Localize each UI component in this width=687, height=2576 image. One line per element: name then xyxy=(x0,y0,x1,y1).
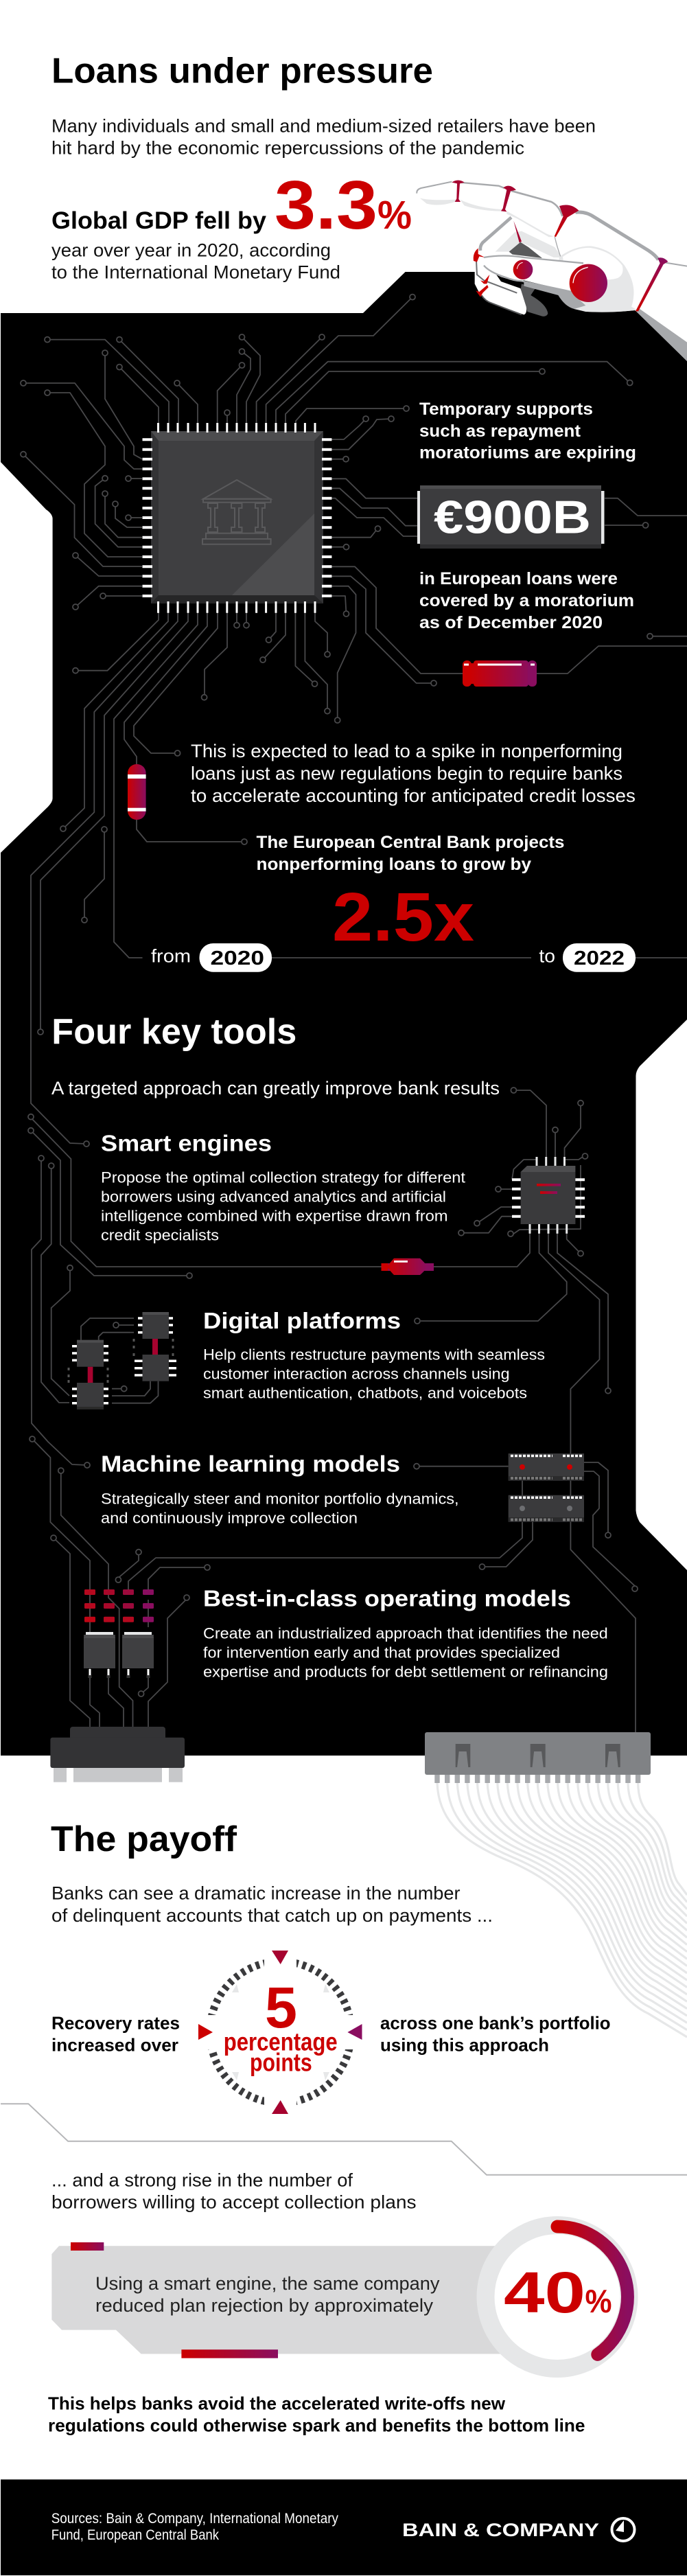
moratorium text: in European loans were xyxy=(419,569,618,588)
tool: smart engines: Propose the optimal collection strategy for different xyxy=(101,1169,465,1186)
footer xyxy=(1,2479,687,2575)
collection plans text xyxy=(51,2170,417,2212)
GDP statistic: to the International Monetary Fund xyxy=(51,262,340,283)
tool: best-in-class operating models: for intervention early and that provides specialized xyxy=(203,1644,560,1661)
conclusion text: This helps banks avoid the accelerated write-offs new xyxy=(48,2393,506,2414)
temporary supports text: moratoriums are expiring xyxy=(419,444,636,463)
icon: red resistor xyxy=(463,660,537,687)
payoff intro text xyxy=(51,1883,493,1926)
icon: bank building xyxy=(202,480,271,544)
moratorium text: covered by a moratorium xyxy=(419,591,634,610)
tool: digital platforms: customer interaction across channels using xyxy=(203,1366,510,1383)
tool: digital platforms: Digital platforms xyxy=(203,1308,401,1333)
black circuit board background xyxy=(1,272,687,1756)
icon: memory chips xyxy=(509,1453,584,1522)
tool: best-in-class operating models: Create an industrialized approach that identifies the need xyxy=(203,1625,608,1642)
temporary supports text xyxy=(419,400,636,463)
collection plans text: borrowers willing to accept collection plans xyxy=(51,2192,417,2212)
intro text xyxy=(51,116,596,159)
tool: machine learning models: and continuously improve collection xyxy=(101,1510,358,1527)
tool: machine learning models: Machine learning models xyxy=(101,1451,400,1476)
tool: smart engines xyxy=(101,1131,465,1244)
targeted approach text: A targeted approach can greatly improve bank results xyxy=(51,1078,500,1099)
tool: smart engines: borrowers using advanced analytics and artificial xyxy=(101,1188,446,1206)
recovery rates text left xyxy=(51,2013,180,2055)
tool: digital platforms xyxy=(203,1308,545,1402)
GDP statistic: % xyxy=(377,193,412,238)
intro text: hit hard by the economic repercussions of the pandemic xyxy=(51,138,524,159)
40% ring gauge: 40 xyxy=(504,2260,585,2325)
timeline from 2020 to 2022 xyxy=(151,943,636,972)
spike text xyxy=(191,741,636,806)
circuit traces: main chip xyxy=(21,295,687,1147)
conclusion text xyxy=(48,2393,585,2436)
recovery rates text left: Recovery rates xyxy=(51,2013,180,2034)
spike text: loans just as new regulations begin to require banks xyxy=(191,763,622,784)
tool: smart engines: credit specialists xyxy=(101,1227,219,1244)
5 percentage points gauge xyxy=(198,1951,362,2114)
icon: right ribbon connector xyxy=(425,1732,651,1783)
GDP statistic xyxy=(51,167,412,283)
portfolio text right: across one bank’s portfolio xyxy=(380,2013,611,2034)
timeline from 2020 to 2022: to xyxy=(539,946,555,967)
heading: four key tools: Four key tools xyxy=(51,1012,296,1052)
sources: Sources: Bain & Company, International Monetary xyxy=(51,2511,338,2527)
tool: smart engines: intelligence combined with expertise drawn from xyxy=(101,1208,448,1225)
€900B chip callout: €900B xyxy=(434,492,591,544)
sources xyxy=(51,2511,338,2543)
GDP statistic: 3.3 xyxy=(275,167,377,244)
tool: machine learning models: Strategically steer and monitor portfolio dynamics, xyxy=(101,1491,459,1508)
payoff intro text: Banks can see a dramatic increase in the number xyxy=(51,1883,460,1904)
ribbon wires xyxy=(437,1783,687,2037)
GDP statistic: Global GDP fell by xyxy=(51,207,267,234)
icon: robot hand xyxy=(417,180,687,361)
GDP statistic: year over year in 2020, according xyxy=(51,240,331,261)
spike text: This is expected to lead to a spike in nonperforming xyxy=(191,741,622,761)
plan rejection panel: reduced plan rejection by approximately xyxy=(95,2295,434,2316)
portfolio text right: using this approach xyxy=(380,2034,549,2055)
temporary supports text: Temporary supports xyxy=(419,400,593,419)
tool: machine learning models xyxy=(101,1451,459,1527)
icon: vertical capacitor xyxy=(128,764,146,820)
40% ring gauge xyxy=(476,2216,638,2378)
temporary supports text: such as repayment xyxy=(419,422,581,441)
40% ring gauge: % xyxy=(585,2283,612,2319)
plan rejection panel: Using a smart engine, the same company xyxy=(95,2273,440,2294)
tool: best-in-class operating models: expertise and products for debt settlement or refinancing xyxy=(203,1664,608,1681)
timeline from 2020 to 2022: 2020 xyxy=(210,947,264,969)
title: Loans under pressure xyxy=(51,51,433,91)
icon: left connector plug xyxy=(50,1727,185,1782)
icon: red contact pads xyxy=(84,1589,154,1622)
tool: best-in-class operating models xyxy=(203,1585,608,1681)
collection plans text: ... and a strong rise in the number of xyxy=(51,2170,353,2190)
tool: smart engines: Smart engines xyxy=(101,1131,272,1156)
circuit traces: tools section xyxy=(28,1088,638,1732)
icon: four linked integrated circuits xyxy=(69,1312,176,1410)
5 percentage points gauge: 5 xyxy=(265,1975,297,2040)
timeline from 2020 to 2022: 2022 xyxy=(574,947,625,969)
portfolio text right xyxy=(380,2013,611,2055)
tool: best-in-class operating models: Best-in-class operating models xyxy=(203,1585,571,1611)
moratorium text: as of December 2020 xyxy=(419,613,603,632)
payoff intro text: of delinquent accounts that catch up on payments ... xyxy=(51,1905,493,1926)
heading: the payoff: The payoff xyxy=(51,1819,237,1859)
thin gray trace divider xyxy=(1,2104,687,2175)
tool: digital platforms: smart authentication, chatbots, and voicebots xyxy=(203,1385,527,1402)
plan rejection panel xyxy=(51,2242,522,2358)
conclusion text: regulations could otherwise spark and benefits the bottom line xyxy=(48,2415,585,2436)
icon: red capsule component xyxy=(382,1258,434,1275)
2.5x statistic: 2.5x xyxy=(332,879,474,956)
tool: digital platforms: Help clients restructure payments with seamless xyxy=(203,1346,545,1364)
logo: Bain & Company xyxy=(402,2518,634,2541)
€900B chip callout xyxy=(417,485,604,549)
recovery rates text left: increased over xyxy=(51,2034,178,2055)
icon: transistors xyxy=(84,1632,154,1678)
logo: Bain & Company: BAIN & COMPANY xyxy=(402,2520,599,2540)
icon: small processor chip xyxy=(512,1157,585,1234)
spike text: to accelerate accounting for anticipated credit losses xyxy=(191,785,636,806)
ECB projection text: nonperforming loans to grow by xyxy=(257,855,531,874)
ECB projection text xyxy=(257,833,564,874)
ECB projection text: The European Central Bank projects xyxy=(257,833,564,852)
5 percentage points gauge: points xyxy=(250,2049,312,2077)
chip pins xyxy=(143,423,331,613)
timeline from 2020 to 2022: from xyxy=(151,946,191,967)
sources: Fund, European Central Bank xyxy=(51,2527,219,2543)
intro text: Many individuals and small and medium-sized retailers have been xyxy=(51,116,596,137)
icon: main bank chip xyxy=(143,423,331,613)
5 percentage points gauge: percentage xyxy=(224,2028,338,2056)
moratorium text xyxy=(419,569,634,632)
